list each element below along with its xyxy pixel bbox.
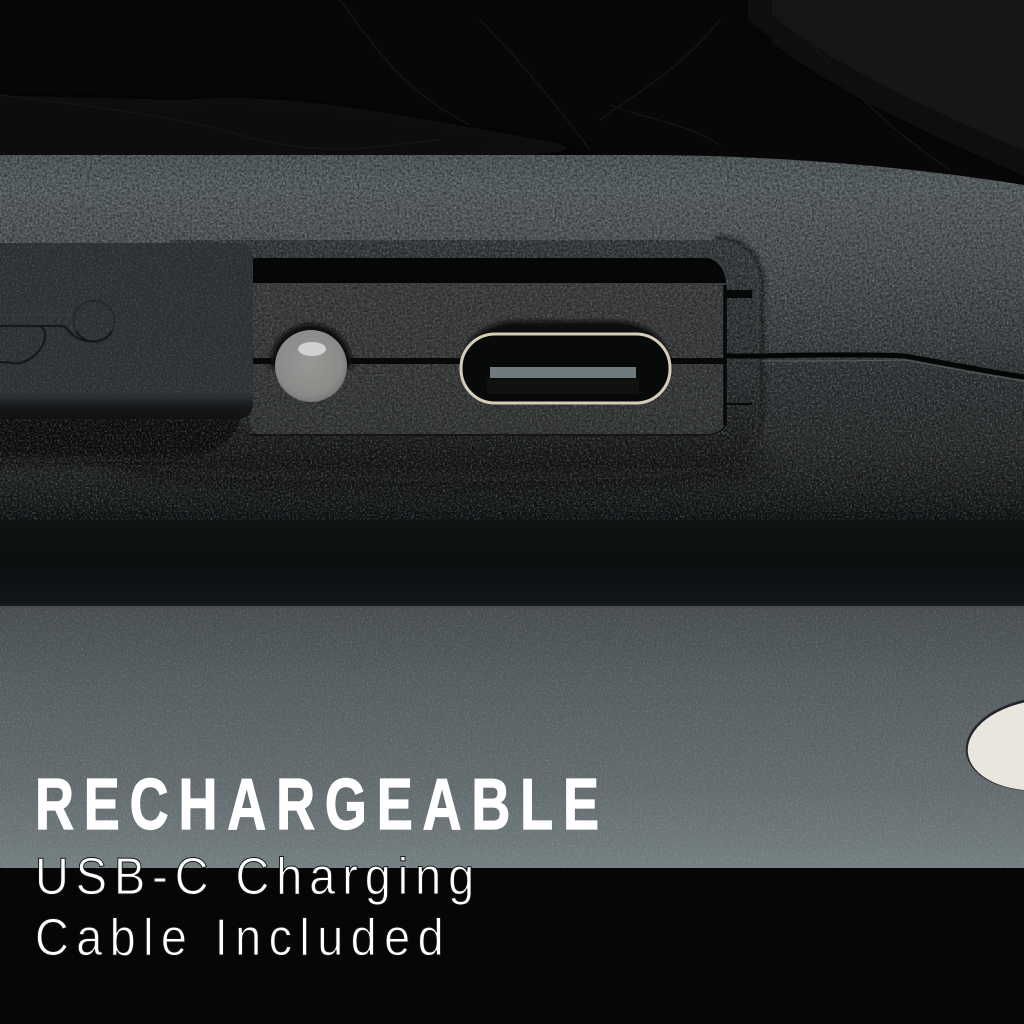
subtitle [35,848,474,967]
led reflection [298,342,326,356]
port surround outer shadow [710,238,762,470]
title: RECHARGEABLE [35,765,599,845]
subtitle line 2: Cable Included [35,909,444,967]
led socket [270,324,352,368]
metal button [966,700,1024,790]
panel seam [250,358,726,364]
texture: grain shadows [0,150,1024,520]
lower housing [0,606,1024,870]
tongue base [487,379,639,394]
shadow under port surround [128,454,758,488]
upper housing [0,150,1024,520]
subtitle line 1: USB-C Charging [35,848,474,906]
recessed port panel [250,258,726,436]
button face [968,702,1024,790]
port shadow [462,321,670,368]
recess top shadow [250,258,726,283]
port shell [461,334,670,403]
cap body [0,243,253,419]
panel grain shadows [250,284,726,436]
texture: lower grain [0,608,1024,870]
indicator led [270,324,352,402]
side notches [725,285,752,425]
housing seam line [726,355,1024,377]
led dome [275,330,347,402]
rubber usb cap [0,243,253,419]
cap grain [0,243,253,393]
recess bottom outline [250,424,726,435]
port tongue [490,367,636,378]
port surround [170,240,757,468]
dark recessed band [0,520,1024,606]
usb-c port [461,321,670,403]
embossed usb symbol [0,300,114,363]
seam highlight [762,360,1024,381]
device body [0,150,1024,870]
texture: highlights [0,150,1024,520]
left shadow under cap [0,419,240,466]
bottom dark strip [0,868,1024,1024]
panel grain [250,284,726,436]
